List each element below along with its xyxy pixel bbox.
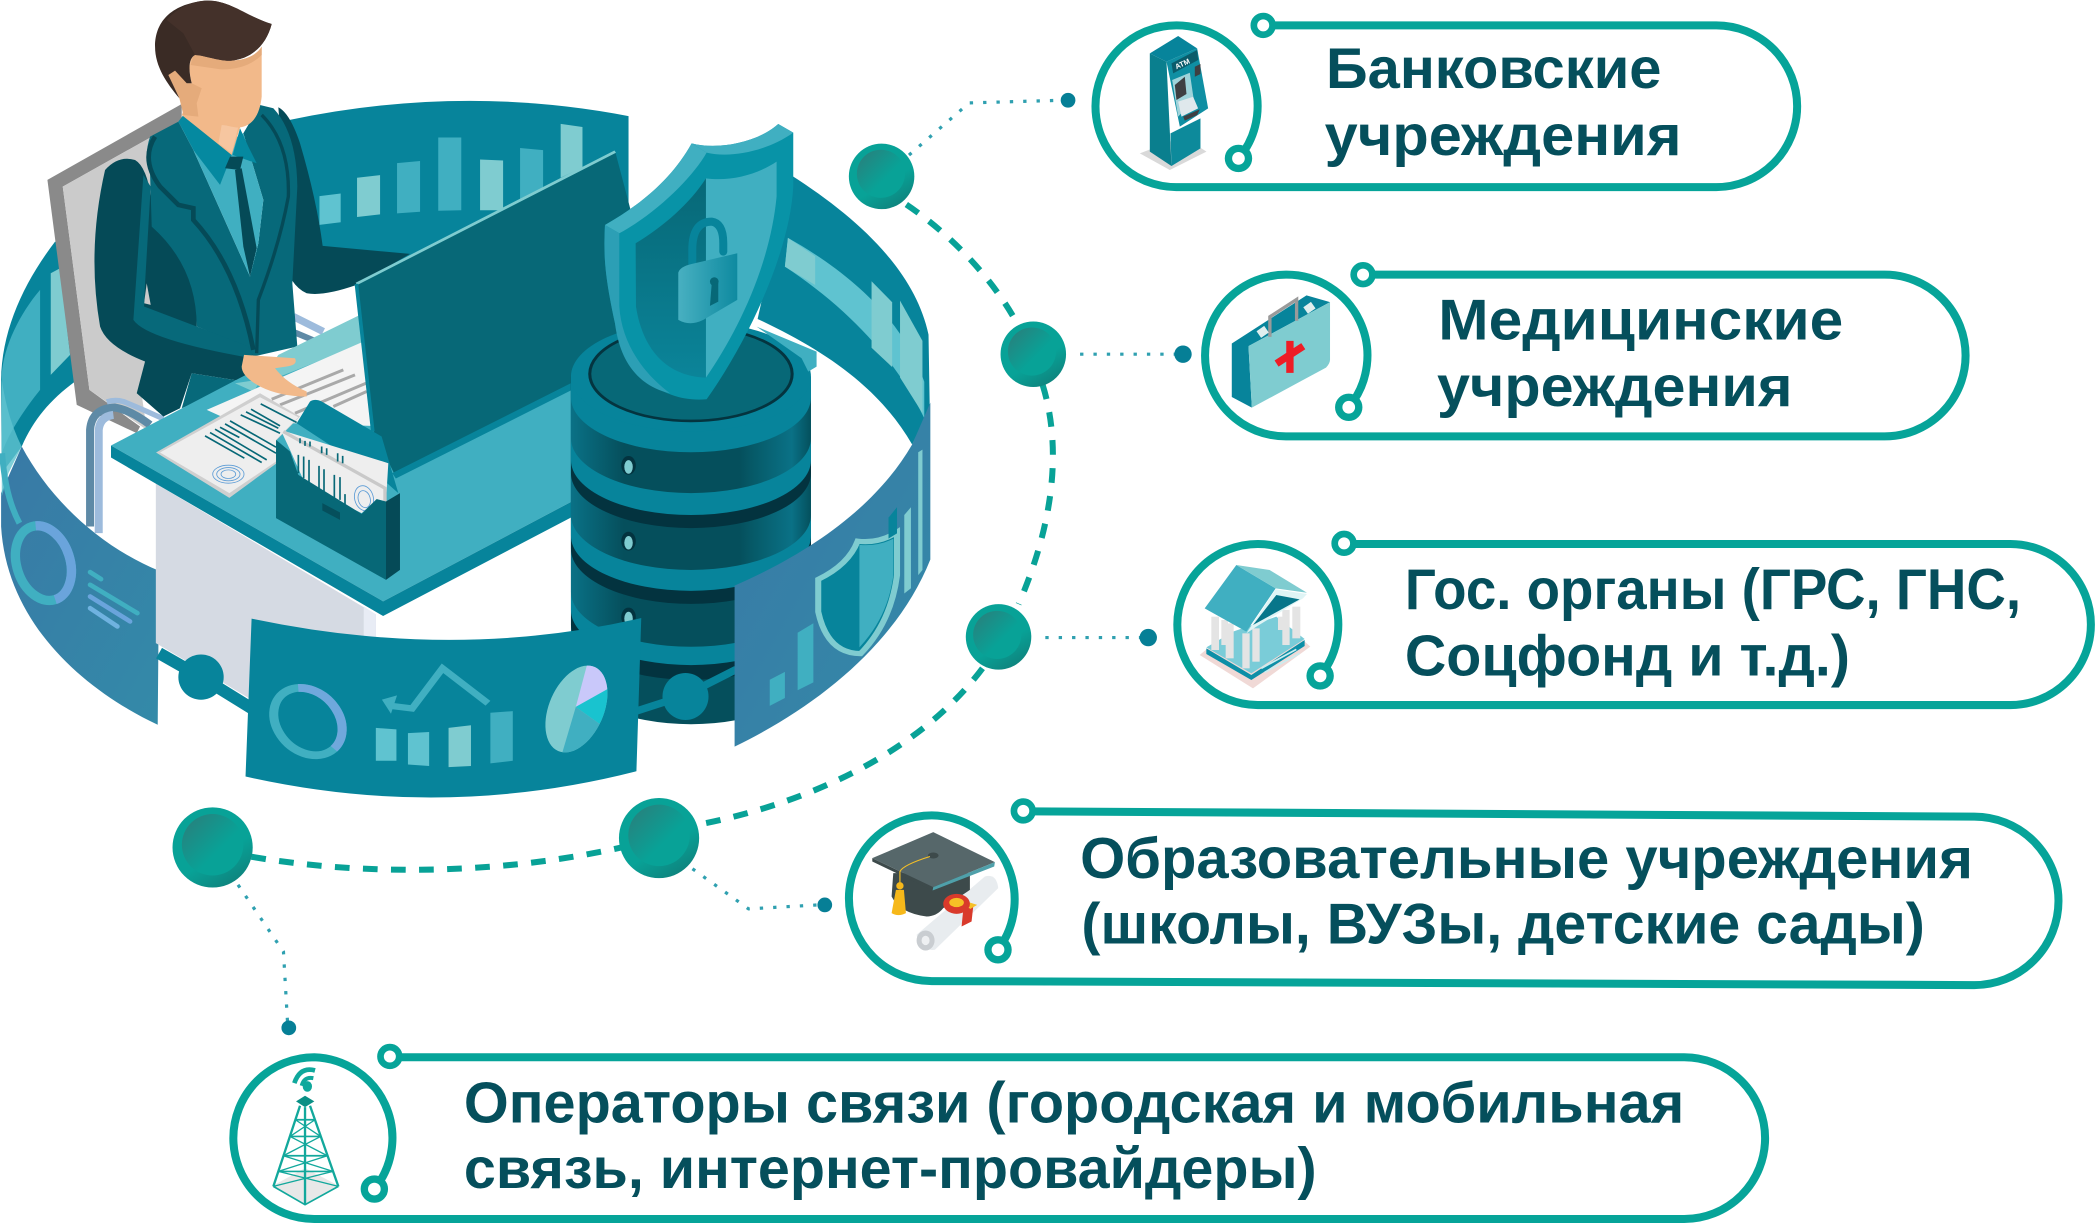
connector strip left [159,653,257,711]
card: telecom: связь, интернет-провайдеры) [464,1137,1317,1201]
icon: graduation cap and diploma [872,832,998,950]
text: education: Образовательные учреждения [1080,827,1973,891]
security shield with padlock [604,124,817,400]
face [168,47,262,128]
center panel with charts [246,618,641,797]
isometric illustration: clerk at desk with server and data ring [1,1,930,797]
card: telecom [233,1047,1765,1219]
trend arrow [382,668,488,714]
desk top [111,316,576,616]
desk pedestal [156,484,376,698]
lapels [149,137,253,350]
text: medical: Медицинские [1438,288,1843,352]
hair [155,1,272,98]
padlock [678,222,737,323]
dashed connector line [251,205,1053,870]
card: government: Соцфонд и т.д.) [1405,625,1850,689]
icon: government building [1200,565,1310,688]
card: medical: учреждения [1437,355,1792,419]
left arm [94,159,253,417]
folder with papers [276,400,400,580]
torso [147,105,297,357]
card: education [849,802,2058,985]
node 1 [849,144,914,209]
data ring: right band [758,175,930,444]
document with fingerprint [156,393,300,498]
text: banks: Банковские [1326,37,1662,101]
icon: medical case [1232,295,1330,408]
card: education: (школы, ВУЗы, детские сады) [1081,893,1925,957]
lower jacket [182,373,244,408]
connector strip right [636,669,736,720]
tie [225,157,243,170]
node 3 [966,604,1031,670]
neck [182,104,199,117]
icon: ATM [1140,36,1208,170]
chair [47,104,323,433]
blue panel left [1,380,159,725]
card: government [1177,534,2091,705]
paper behind folder [207,315,371,427]
panel text lines [90,572,137,626]
clerk figure [94,1,410,417]
dotted leader lines [238,100,1176,1021]
blue panel right [735,403,930,747]
icon: ATM: ATM [1174,57,1191,71]
node 4 [619,798,699,878]
right sleeve [278,107,410,294]
bar chart [376,711,513,767]
shirt [193,133,263,277]
card: banks [1095,16,1797,187]
icon: signal tower [272,1070,340,1205]
card: medical [1205,265,1966,436]
hand [242,355,307,397]
chair legs [90,400,163,533]
panel ring [6,518,81,608]
pie chart [545,666,608,752]
data ring: back band with bars [288,101,629,272]
card: banks: учреждения [1325,104,1682,168]
node 2 [1001,321,1066,387]
forearm [133,175,253,358]
data ring: left band [1,242,75,473]
donut [260,677,356,766]
monitor [356,152,630,476]
node 5 [173,807,253,888]
leader end dots [281,93,1192,1035]
server stack [571,322,811,724]
text: telecom: Операторы связи (городская и мобильная [464,1071,1684,1135]
text: government: Гос. органы (ГРС, ГНС, [1405,558,2021,622]
